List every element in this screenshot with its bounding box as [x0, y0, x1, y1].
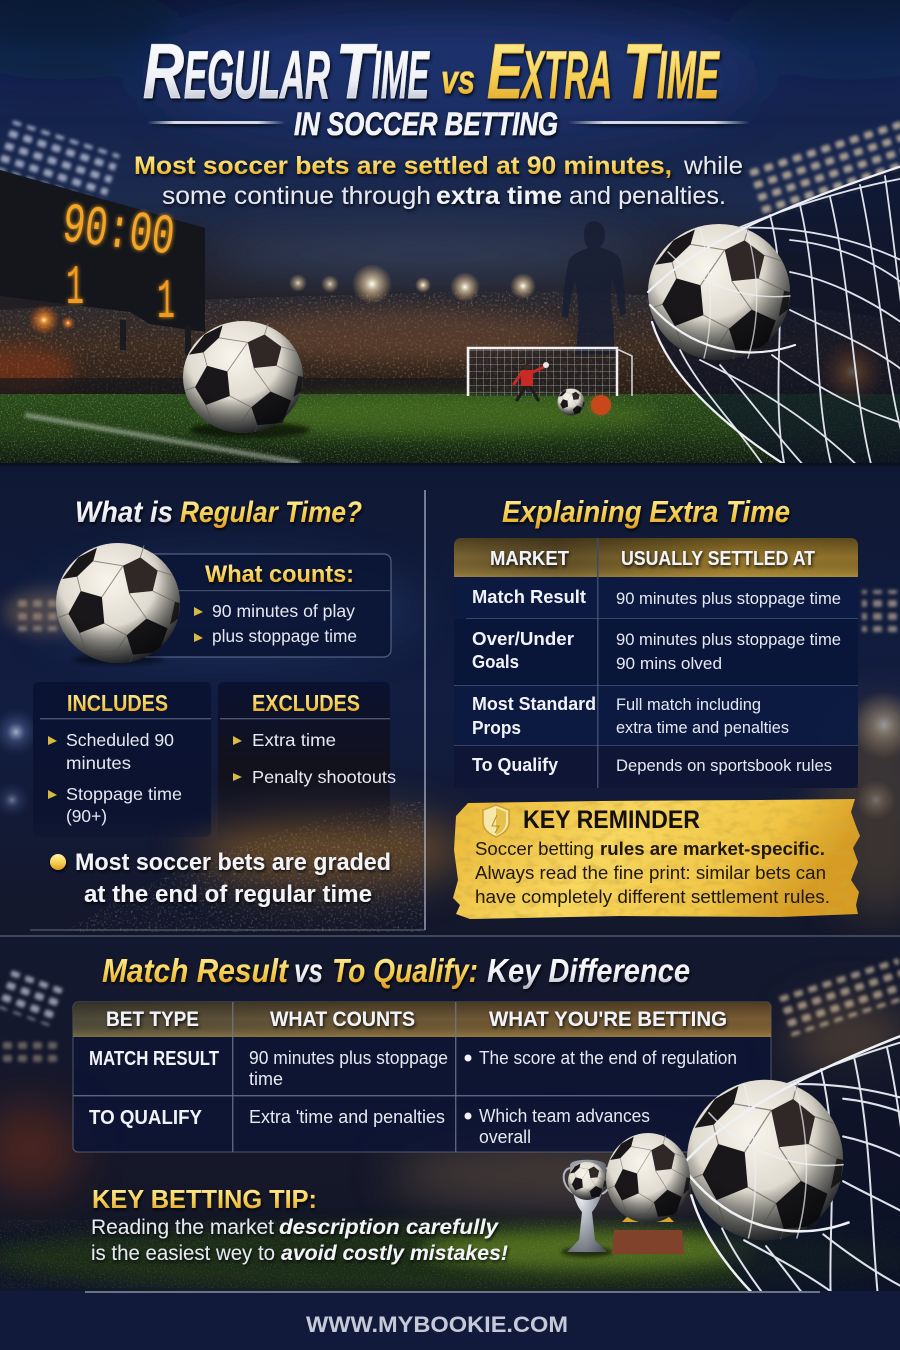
market names	[472, 586, 596, 775]
scoreboard	[0, 170, 205, 355]
heading: match result vs to qualify: To Qualify:	[332, 952, 478, 989]
table header	[490, 548, 815, 570]
title: extra time: XTRA	[520, 37, 612, 113]
panel: includes	[33, 682, 211, 837]
excludes list: Penalty shootouts	[252, 767, 396, 787]
heading: match result vs to qualify: Match Result	[102, 952, 290, 989]
market names: Match Result	[472, 586, 586, 607]
subtitle with rules	[147, 106, 750, 142]
middle section background	[0, 463, 900, 937]
title: extra time: IME	[657, 37, 720, 113]
title	[143, 27, 720, 115]
bet type names	[89, 1048, 219, 1129]
what counts heading: What counts:	[205, 561, 354, 588]
what counts values: Extra 'time and penalties	[249, 1107, 445, 1127]
what counts values: 90 minutes plus stoppage	[249, 1048, 448, 1068]
night sky	[0, 13, 900, 320]
callout: graded at end of regular time: Most soccer bets are graded	[75, 849, 391, 876]
market names: Props	[472, 717, 521, 738]
icon: soccer ball	[56, 543, 180, 665]
what counts values: time	[249, 1069, 283, 1089]
bet type names: TO QUALIFY	[89, 1107, 203, 1129]
includes list: minutes	[66, 753, 131, 773]
title: extra time: E	[487, 27, 524, 115]
key reminder body: Always read the fine print: similar bets can	[475, 863, 826, 883]
panel: what is regular time	[33, 496, 396, 908]
callout: key betting tip	[91, 1184, 508, 1265]
excludes list: Extra time	[252, 730, 336, 750]
callout: graded at end of regular time: at the end of regular time	[84, 881, 372, 908]
intro text: Most soccer bets are settled at 90 minutes,	[134, 152, 672, 180]
floodlight right	[745, 114, 900, 221]
heading: explaining extra time: Explaining Extra Time	[502, 494, 790, 529]
settlement values: 90 mins olved	[616, 654, 722, 673]
intro text: extra time	[436, 182, 562, 210]
tip body	[91, 1216, 508, 1265]
panel: excludes	[218, 682, 396, 842]
heading: what is regular time: What is	[75, 496, 173, 529]
heading: what is regular time: Regular Time?	[180, 496, 362, 529]
stadium lights row	[28, 264, 536, 336]
sky clouds	[0, 0, 900, 279]
key reminder body	[475, 839, 830, 907]
callout: graded at end of regular time	[50, 849, 391, 908]
intro text	[134, 152, 743, 210]
settlement values: Depends on sportsbook rules	[616, 756, 832, 775]
bottom section background	[0, 937, 900, 1350]
net and ball lower right	[686, 1035, 900, 1291]
heading: match result vs to qualify: Key Difference	[487, 952, 690, 989]
footer	[0, 1291, 900, 1350]
title: regular time	[143, 27, 430, 115]
tip body: avoid costly mistakes!	[281, 1242, 508, 1265]
net glow	[824, 344, 880, 401]
comparison header	[106, 1008, 727, 1031]
table header: USUALLY SETTLED AT	[621, 548, 815, 570]
market names: Most Standard	[472, 693, 596, 714]
what you're betting values	[464, 1048, 737, 1147]
includes list: Scheduled 90	[66, 730, 174, 750]
market names: To Qualify	[472, 754, 559, 775]
includes list: (90+)	[66, 806, 107, 826]
tip body: description carefully	[279, 1216, 499, 1239]
icon: shield	[483, 805, 509, 837]
icon: ball on gold stand	[606, 1133, 690, 1254]
small goal ball	[558, 388, 584, 416]
heading: match result vs to qualify: vs	[294, 952, 323, 989]
includes heading: INCLUDES	[67, 690, 168, 716]
market names: Goals	[472, 651, 519, 672]
table: market settlement	[454, 538, 858, 788]
comparison header: WHAT YOU'RE BETTING	[489, 1008, 727, 1031]
what counts list	[194, 601, 357, 646]
what you're betting values: overall	[479, 1127, 531, 1147]
key reminder body: have completely different settlement rules.	[475, 887, 830, 907]
large ball on pitch	[183, 321, 310, 438]
intro text: and penalties.	[569, 182, 726, 210]
market names: Over/Under	[472, 628, 574, 649]
excludes list	[233, 730, 396, 787]
panel: explaining extra time	[453, 494, 860, 919]
icon: trophy	[561, 1160, 613, 1257]
title: regular time: EGULAR	[184, 37, 330, 113]
what counts values	[249, 1048, 448, 1127]
scoreboard clock: 90:00	[59, 193, 178, 271]
tip body: is the easiest wey to	[91, 1242, 275, 1265]
key reminder heading: KEY REMINDER	[523, 806, 700, 834]
subtitle with rules: IN SOCCER BETTING	[294, 106, 558, 142]
panel: what counts	[140, 554, 391, 657]
title: IME	[372, 37, 430, 113]
comparison header: BET TYPE	[106, 1008, 199, 1031]
title: vs: vs	[441, 58, 475, 102]
title: regular time: R	[143, 27, 184, 115]
heading: match result vs to qualify	[102, 952, 690, 989]
tip heading: KEY BETTING TIP:	[92, 1184, 317, 1214]
player silhouette	[562, 221, 626, 354]
tip body: Reading the market	[91, 1216, 274, 1239]
what you're betting values: Which team advances	[479, 1106, 650, 1126]
title: extra time	[487, 27, 720, 115]
includes list	[48, 730, 182, 826]
scoreboard score: 1	[66, 256, 84, 320]
settlement values: Full match including	[616, 695, 761, 714]
orange ball	[588, 392, 612, 418]
settlement values	[616, 589, 841, 775]
title: extra time: T	[623, 27, 663, 115]
what you're betting values: The score at the end of regulation	[479, 1048, 737, 1068]
table: bet type comparison	[73, 1002, 771, 1152]
goalkeeper	[514, 362, 549, 400]
scoreboard score: 1	[157, 270, 175, 334]
scoreboard score	[65, 264, 177, 320]
pitch grass	[0, 394, 900, 466]
what counts list: 90 minutes of play	[212, 601, 355, 621]
floodlight left	[0, 119, 120, 204]
settlement values: 90 minutes plus stoppage time	[616, 589, 841, 608]
heading: what is regular time	[75, 496, 362, 529]
includes list: Stoppage time	[66, 784, 182, 804]
comparison header: WHAT COUNTS	[270, 1008, 415, 1031]
key reminder body: rules are market-specific.	[600, 839, 825, 859]
stadium crowd	[0, 291, 900, 400]
intro text: some continue through	[162, 182, 431, 210]
excludes heading: EXCLUDES	[252, 690, 360, 716]
settlement values: 90 minutes plus stoppage time	[616, 630, 841, 649]
title: regular time: T	[336, 27, 378, 115]
callout: key reminder	[453, 799, 860, 919]
goal and net	[468, 347, 632, 396]
bet type names: MATCH RESULT	[89, 1048, 219, 1070]
table header: MARKET	[490, 548, 569, 570]
ball in net	[648, 165, 900, 470]
what counts list: plus stoppage time	[212, 626, 357, 646]
key reminder body: Soccer betting	[475, 839, 594, 859]
settlement values: extra time and penalties	[616, 718, 789, 737]
intro text: while	[683, 152, 743, 180]
footer url: WWW.MYBOOKIE.COM	[306, 1312, 568, 1337]
hero stadium scene	[0, 0, 900, 470]
